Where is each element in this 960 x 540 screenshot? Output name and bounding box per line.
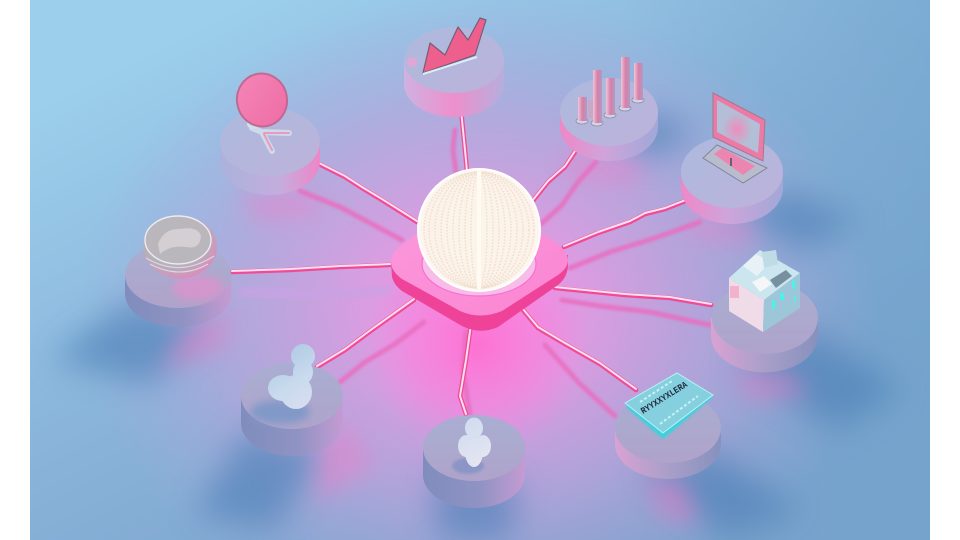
pedestal: glass card node bbox=[615, 373, 721, 479]
pedestal: shell node bbox=[125, 216, 231, 327]
pedestal: cube node bbox=[711, 250, 818, 372]
pedestal: pawn node bbox=[423, 415, 525, 508]
pedestal: line chart node bbox=[404, 18, 504, 117]
icon: metal columns bbox=[576, 57, 644, 126]
shell wire floor shadow bbox=[240, 288, 390, 296]
pedestal: coin node bbox=[220, 70, 320, 195]
pedestal: bar chart node bbox=[560, 57, 658, 161]
hub base side bbox=[391, 255, 568, 331]
pedestal: monitor node bbox=[681, 93, 783, 224]
sphere collar bbox=[422, 232, 536, 296]
icon: round shell object bbox=[143, 216, 217, 278]
hub top plate bbox=[391, 202, 568, 316]
wire shadows bbox=[300, 130, 710, 416]
pedestal shadows cast away from the hub bbox=[50, 110, 900, 540]
icon: glowing data card: RYYXXYXLERA bbox=[639, 380, 690, 417]
wires bbox=[232, 100, 711, 414]
icon: white pawn figure bbox=[458, 418, 491, 467]
pink reflections beside each pedestal bbox=[160, 150, 810, 525]
icon: jagged pink chart bbox=[407, 18, 486, 74]
central hub bbox=[391, 168, 568, 331]
icon: circuit cube bbox=[729, 250, 800, 332]
icon: clay bird figure bbox=[268, 344, 315, 409]
mesh sphere bbox=[417, 168, 541, 292]
pedestal: clay figure node bbox=[241, 344, 343, 456]
icon: pink disc on stand bbox=[233, 70, 291, 151]
icon: monitor bbox=[703, 93, 767, 183]
